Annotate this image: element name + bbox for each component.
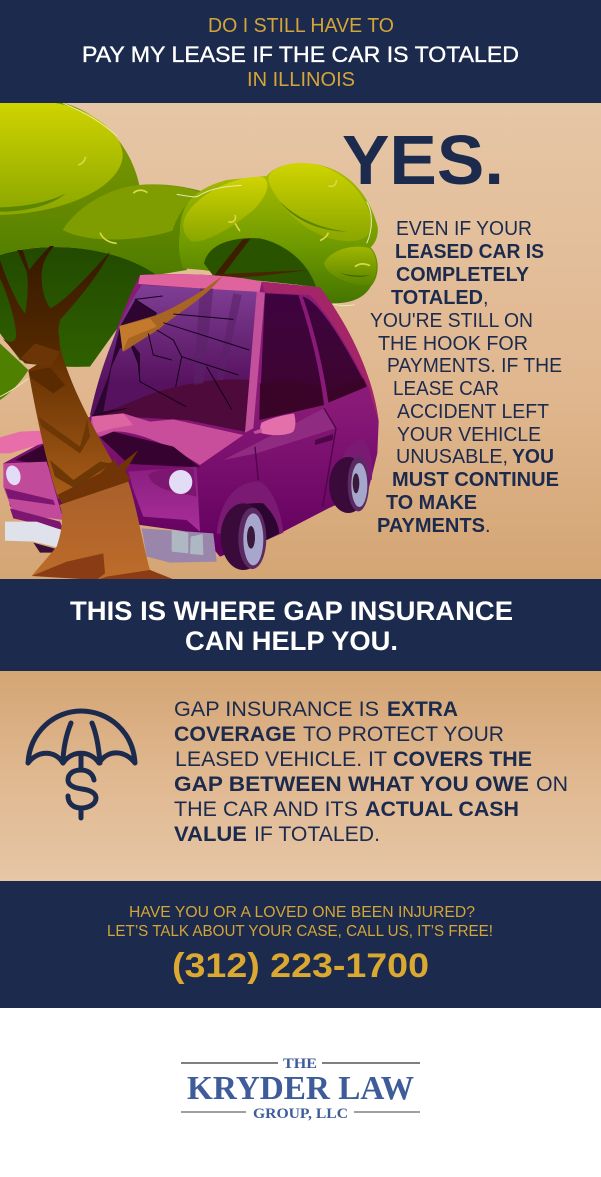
paragraph: still on the hook: TO MAKE: [386, 492, 477, 514]
paragraph: still on the hook: YOU: [512, 446, 554, 468]
paragraph: still on the hook: THE HOOK FOR: [378, 333, 528, 355]
paragraph: gap coverage: TO PROTECT YOUR: [303, 723, 504, 746]
call to action band: LET’S TALK ABOUT YOUR CASE, CALL US, IT’S FREE!: [107, 923, 493, 940]
paragraph: still on the hook: MUST CONTINUE: [392, 469, 559, 491]
panel: yes answer with illustration: [0, 103, 601, 580]
logo: The Kryder Law Group: THE: [283, 1056, 317, 1072]
paragraph: still on the hook: COMPLETELY: [396, 264, 530, 286]
logo: The Kryder Law Group: GROUP, LLC: [253, 1106, 348, 1122]
paragraph: still on the hook: .: [485, 515, 491, 537]
header band: IN ILLINOIS: [247, 69, 355, 91]
paragraph: still on the hook: LEASED CAR IS: [395, 241, 544, 263]
paragraph: still on the hook: PAYMENTS: [377, 515, 485, 537]
panel: gap insurance explanation: [0, 671, 601, 881]
paragraph: still on the hook: YOUR VEHICLE: [397, 424, 541, 446]
heading band: gap insurance: THIS IS WHERE GAP INSURANCE: [70, 596, 513, 626]
paragraph: still on the hook: [370, 218, 562, 537]
paragraph: still on the hook: LEASE CAR: [393, 378, 499, 400]
paragraph: gap coverage: ACTUAL CASH: [365, 798, 519, 821]
heading band: gap insurance: CAN HELP YOU.: [185, 626, 398, 656]
header band: DO I STILL HAVE TO: [208, 15, 394, 37]
paragraph: gap coverage: COVERAGE: [174, 723, 296, 746]
paragraph: still on the hook: UNUSABLE,: [396, 446, 508, 468]
icon: umbrella with dollar sign: [28, 711, 135, 818]
paragraph: gap coverage: ON: [536, 773, 568, 796]
illustration: tree crashed into purple car: [0, 103, 379, 580]
paragraph: gap coverage: [174, 698, 568, 846]
paragraph: gap coverage: COVERS THE: [393, 748, 532, 771]
paragraph: gap coverage: EXTRA: [387, 698, 458, 721]
paragraph: still on the hook: EVEN IF YOUR: [396, 218, 532, 240]
paragraph: gap coverage: IF TOTALED.: [254, 823, 380, 846]
paragraph: still on the hook: TOTALED: [391, 287, 483, 309]
paragraph: still on the hook: ,: [483, 287, 489, 309]
paragraph: still on the hook: ACCIDENT LEFT: [397, 401, 549, 423]
call to action band: HAVE YOU OR A LOVED ONE BEEN INJURED?: [129, 904, 475, 921]
yes heading: YES.: [342, 121, 504, 199]
header band: PAY MY LEASE IF THE CAR IS TOTALED: [82, 42, 519, 67]
header band: [0, 0, 601, 103]
logo: The Kryder Law Group: [181, 1056, 420, 1122]
call to action band: [0, 881, 601, 1008]
paragraph: gap coverage: LEASED VEHICLE. IT: [175, 748, 387, 771]
paragraph: gap coverage: GAP INSURANCE IS: [174, 698, 379, 721]
paragraph: gap coverage: GAP BETWEEN WHAT YOU OWE: [174, 773, 529, 796]
paragraph: still on the hook: PAYMENTS. IF THE: [387, 355, 562, 377]
paragraph: still on the hook: YOU'RE STILL ON: [370, 310, 533, 332]
heading band: gap insurance: [0, 579, 601, 671]
logo: The Kryder Law Group: KRYDER LAW: [187, 1070, 414, 1107]
paragraph: gap coverage: VALUE: [174, 823, 247, 846]
paragraph: gap coverage: THE CAR AND ITS: [174, 798, 358, 821]
call to action band: (312) 223-1700: [172, 947, 429, 985]
